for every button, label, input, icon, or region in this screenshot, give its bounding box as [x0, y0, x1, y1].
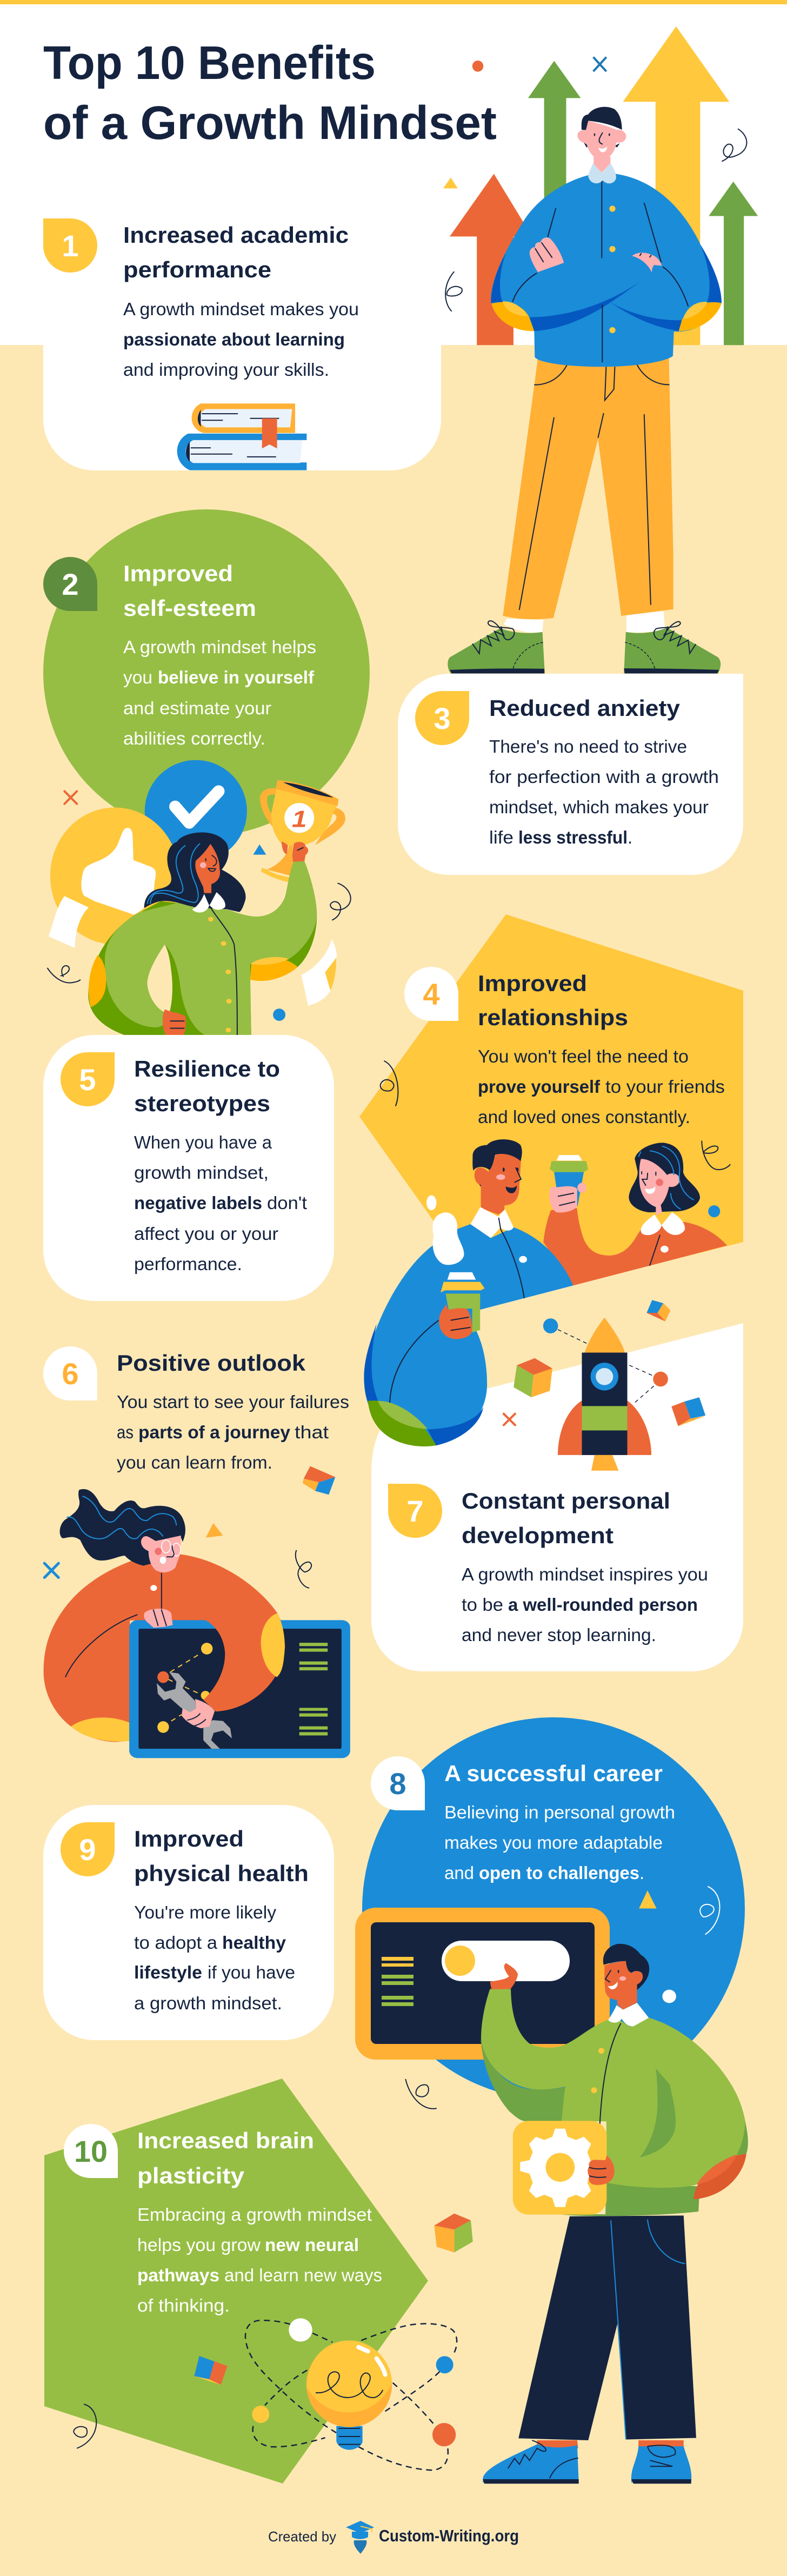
heading 6: Positive outlook: [117, 1350, 306, 1376]
illustration: rocket: [504, 1300, 705, 1471]
text 3: mindset, which makes your: [489, 797, 709, 817]
text 5: negative labels: [134, 1193, 262, 1213]
title: of a Growth Mindset: [43, 97, 497, 149]
badge 3: 3: [433, 701, 451, 735]
illustration: growth arrows: [443, 26, 758, 345]
text 8: makes you more adaptable: [444, 1833, 663, 1853]
icon: books: [177, 403, 306, 470]
panel: benefit 7 text: [388, 1484, 708, 1645]
text 1: and improving your skills.: [123, 360, 329, 380]
text 8: .: [639, 1863, 644, 1883]
heading 2: self-esteem: [123, 595, 256, 621]
man: [364, 1224, 573, 1446]
heading 1: Increased academic: [123, 222, 349, 248]
text 4: prove yourself: [478, 1077, 601, 1097]
heading 9: physical health: [134, 1861, 309, 1886]
footer credit: Custom-Writing.org: [379, 2526, 519, 2545]
man: sweater, head and gear panel: [481, 1944, 748, 2216]
text 2: you: [123, 667, 152, 687]
badge 10: 10: [74, 2134, 108, 2168]
trophy: [260, 780, 345, 885]
text 7: and never stop learning.: [462, 1625, 656, 1645]
panel: benefit 10 shape: [44, 2079, 428, 2484]
heading 5: [134, 1056, 280, 1116]
text 4: and loved ones constantly.: [478, 1107, 690, 1127]
badge 1: [43, 218, 97, 273]
text 6: you can learn from.: [117, 1452, 272, 1472]
badge 8: [371, 1756, 425, 1810]
text 6: [117, 1392, 349, 1472]
badge 3: [415, 691, 469, 745]
squiggle near panel 4: [381, 1061, 398, 1106]
text 8: [444, 1802, 675, 1883]
text 3: [489, 736, 719, 847]
text 5: [134, 1132, 307, 1274]
text 8: open to challenges: [479, 1863, 639, 1883]
heading 3: Reduced anxiety: [489, 695, 681, 721]
badge 5: [61, 1052, 115, 1106]
heading 7: Constant personal: [462, 1488, 670, 1513]
text 2: abilities correctly.: [123, 728, 265, 748]
text 3: life: [489, 827, 513, 847]
illustration: light bulb with orbits: [245, 2318, 457, 2470]
text 3: There's no need to strive: [489, 736, 687, 756]
badge 6: [43, 1346, 97, 1400]
badge 2: [43, 557, 97, 611]
text 4: [478, 1046, 725, 1127]
title: [43, 37, 497, 149]
badge 4: 4: [423, 977, 440, 1011]
badge 9: 9: [79, 1833, 96, 1867]
heading 2: Improved: [123, 561, 233, 586]
illustration: woman with tablet: [44, 1489, 350, 1758]
heading 9: [134, 1826, 309, 1886]
text 1: A growth mindset makes you: [123, 299, 359, 319]
illustration: standing man: [448, 107, 722, 673]
text 2: A growth mindset helps: [123, 637, 316, 657]
text 7: A growth mindset inspires you: [462, 1564, 708, 1584]
wrench: [157, 1672, 196, 1712]
footer credit: [268, 2521, 519, 2554]
text 9: a growth mindset.: [134, 1993, 282, 2013]
heading 4: Improved: [478, 971, 587, 996]
icon: cube near panel 6: [303, 1466, 335, 1495]
text 9: You're more likely: [134, 1902, 277, 1922]
text 10: new neural: [265, 2235, 359, 2255]
heading 4: relationships: [478, 1005, 628, 1030]
text 1: [123, 299, 359, 380]
text 8: and: [444, 1863, 474, 1883]
footer credit: Created by: [268, 2528, 336, 2545]
badge 6: 6: [62, 1357, 79, 1391]
text 5: performance.: [134, 1254, 242, 1274]
text 3: for perfection with a growth: [489, 767, 719, 787]
text 10: of thinking.: [137, 2295, 230, 2315]
panel: benefit 4 text: [404, 967, 725, 1127]
text 2: believe in yourself: [158, 667, 315, 687]
text 6: that: [295, 1422, 329, 1442]
text 7: [462, 1564, 708, 1645]
text 8: Believing in personal growth: [444, 1802, 675, 1822]
text 9: [134, 1902, 295, 2013]
illustration: two friends with coffee: [364, 1139, 730, 1446]
text 4: to your friends: [605, 1077, 725, 1097]
man: decoration, trousers and shoes: [405, 1887, 720, 2484]
man: torso and head: [491, 107, 722, 367]
text 3: .: [628, 827, 632, 847]
illustration: tablet with toggle: [355, 1908, 610, 2060]
badge 10: [64, 2124, 118, 2178]
heading 10: [137, 2128, 314, 2188]
text 9: if you have: [208, 1962, 295, 1982]
text 7: to be: [462, 1595, 503, 1615]
heading 5: stereotypes: [134, 1091, 270, 1116]
text 2: [123, 637, 316, 748]
text 10: helps you grow: [137, 2235, 261, 2255]
hair and face: [144, 832, 246, 912]
text 10: Embracing a growth mindset: [137, 2205, 372, 2225]
heading 9: Improved: [134, 1826, 244, 1851]
text 2: and estimate your: [123, 698, 271, 718]
heading 10: plasticity: [137, 2163, 245, 2188]
badge 5: 5: [79, 1063, 96, 1097]
arm: [203, 1608, 285, 1711]
panel: benefit 1 card: [43, 218, 441, 470]
text 6: as: [117, 1422, 134, 1442]
badge 7: 7: [406, 1494, 424, 1528]
text 9: healthy: [222, 1933, 286, 1953]
trophy: 1: [292, 806, 307, 832]
heading 8: A successful career: [444, 1761, 663, 1786]
panel: benefit 6 text: [43, 1346, 349, 1472]
text 5: When you have a: [134, 1132, 272, 1152]
icon: logo pen and cap: [346, 2521, 374, 2554]
woman: [543, 1208, 727, 1285]
heading 5: Resilience to: [134, 1056, 280, 1081]
text 5: affect you or your: [134, 1224, 278, 1244]
title: Top 10 Benefits: [43, 37, 376, 89]
badge 7: [388, 1484, 442, 1538]
panel: benefit 9 card: [43, 1805, 334, 2040]
heading 2: [123, 561, 256, 621]
hand on tablet: [144, 1609, 173, 1628]
heading 7: [462, 1488, 670, 1548]
text 10: and learn new ways: [224, 2265, 382, 2285]
panel: benefit 2 circle: [43, 509, 370, 836]
panel: benefit 7 card shape: [371, 1323, 743, 1671]
heading 10: Increased brain: [137, 2128, 314, 2153]
text 10: [137, 2205, 382, 2315]
head and hair: [60, 1489, 185, 1565]
badge 1: 1: [62, 229, 79, 263]
body: [88, 861, 317, 1035]
panel: benefit 5 card: [43, 1035, 334, 1301]
text 5: don't: [267, 1193, 307, 1213]
illustration: career man: [405, 1887, 748, 2484]
illustration: woman with trophy: [48, 760, 351, 1035]
text 5: growth mindset,: [134, 1163, 269, 1183]
text 7: a well-rounded person: [508, 1595, 698, 1615]
text 10: pathways: [137, 2265, 219, 2285]
panel: benefit 4 shape: [359, 914, 743, 1305]
heading 4: [478, 971, 628, 1030]
man: legs and shoes: [448, 357, 721, 673]
illustration: cubes and squiggle near panel 10: [74, 2214, 473, 2448]
text 6: You start to see your failures: [117, 1392, 349, 1412]
badge 8: 8: [389, 1767, 406, 1801]
heading 1: [123, 222, 349, 282]
badge 2: 2: [62, 567, 79, 601]
body: [44, 1555, 281, 1742]
text 4: You won't feel the need to: [478, 1046, 689, 1066]
panel: benefit 8 circle: [362, 1717, 745, 2100]
panel: benefit 3 card: [398, 674, 743, 875]
heading 1: performance: [123, 257, 271, 282]
text 3: less stressful: [518, 827, 628, 847]
text 6: parts of a journey: [138, 1422, 291, 1442]
badge 4: [404, 967, 458, 1021]
heading 7: development: [462, 1523, 613, 1548]
text 9: lifestyle: [134, 1962, 202, 1982]
badge 9: [61, 1822, 115, 1876]
tablet: [129, 1620, 350, 1758]
text 9: to adopt a: [134, 1933, 218, 1953]
text 1: passionate about learning: [123, 329, 345, 349]
